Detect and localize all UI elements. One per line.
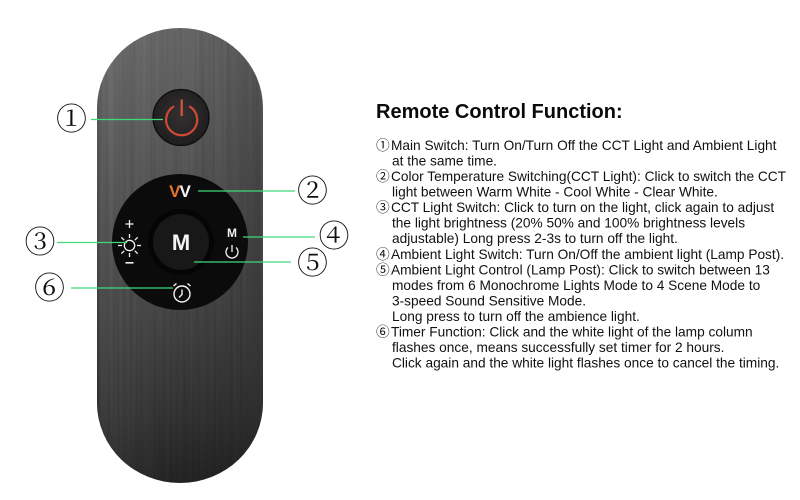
- function description text: ④: [376, 247, 390, 262]
- function description text: flashes once, means successfully set timer for 2 hours.: [392, 340, 724, 355]
- function description text: ①: [376, 138, 390, 153]
- icon: brightness sun with plus and minus: [118, 220, 141, 263]
- control disc: [112, 174, 248, 310]
- icon: timer alarm clock: [174, 284, 190, 302]
- function description text: [376, 138, 787, 370]
- callout numerals: [24, 102, 350, 306]
- function description text: Long press to turn off the ambience light.: [392, 309, 640, 324]
- power button: [153, 90, 209, 146]
- function description text: the light brightness (20% 50% and 100% brightness levels: [392, 216, 745, 230]
- callout numerals: ⑥: [34, 271, 65, 306]
- callout lines: [57, 120, 315, 288]
- function description text: Ambient Light Control (Lamp Post): Click to switch between 13: [391, 262, 770, 278]
- function description text: ⑤: [376, 262, 390, 278]
- function description text: Click again and the white light flashes once to cancel the timing.: [392, 356, 779, 370]
- function description text: modes from 6 Monochrome Lights Mode to 4 Scene Mode to: [392, 278, 761, 293]
- function description text: Timer Function: Click and the white light of the lamp column: [391, 324, 753, 340]
- callout numerals: ④: [318, 219, 350, 254]
- function description text: ②: [376, 169, 390, 184]
- function description text: CCT Light Switch: Click to turn on the light, click again to adjust: [391, 200, 774, 215]
- callout numerals: ①: [56, 102, 87, 137]
- function description text: Main Switch: Turn On/Turn Off the CCT Light and Ambient Light: [391, 138, 777, 153]
- function description text: ③: [376, 200, 390, 215]
- function description text: adjustable) Long press 2-3s to turn off the light.: [392, 231, 678, 246]
- remote control body: [97, 28, 263, 483]
- function description text: Ambient Light Switch: Turn On/Off the ambient light (Lamp Post).: [391, 247, 784, 262]
- icon: colour temperature VV: VV: [169, 182, 192, 201]
- title: Remote Control Function:: [376, 101, 623, 123]
- function description text: Color Temperature Switching(CCT Light): Click to switch the CCT: [391, 169, 787, 184]
- icon: ambient light switch: M: [227, 226, 237, 240]
- function description text: at the same time.: [392, 154, 497, 168]
- function description text: light between Warm White - Cool White - Clear White.: [392, 184, 718, 200]
- callout numerals: ⑤: [297, 246, 328, 281]
- function description text: 3-speed Sound Sensitive Mode.: [392, 294, 586, 308]
- button label M: M: [172, 230, 190, 255]
- callout numerals: ②: [297, 174, 328, 209]
- function description text: ⑥: [376, 324, 390, 340]
- callout numerals: ③: [24, 225, 56, 260]
